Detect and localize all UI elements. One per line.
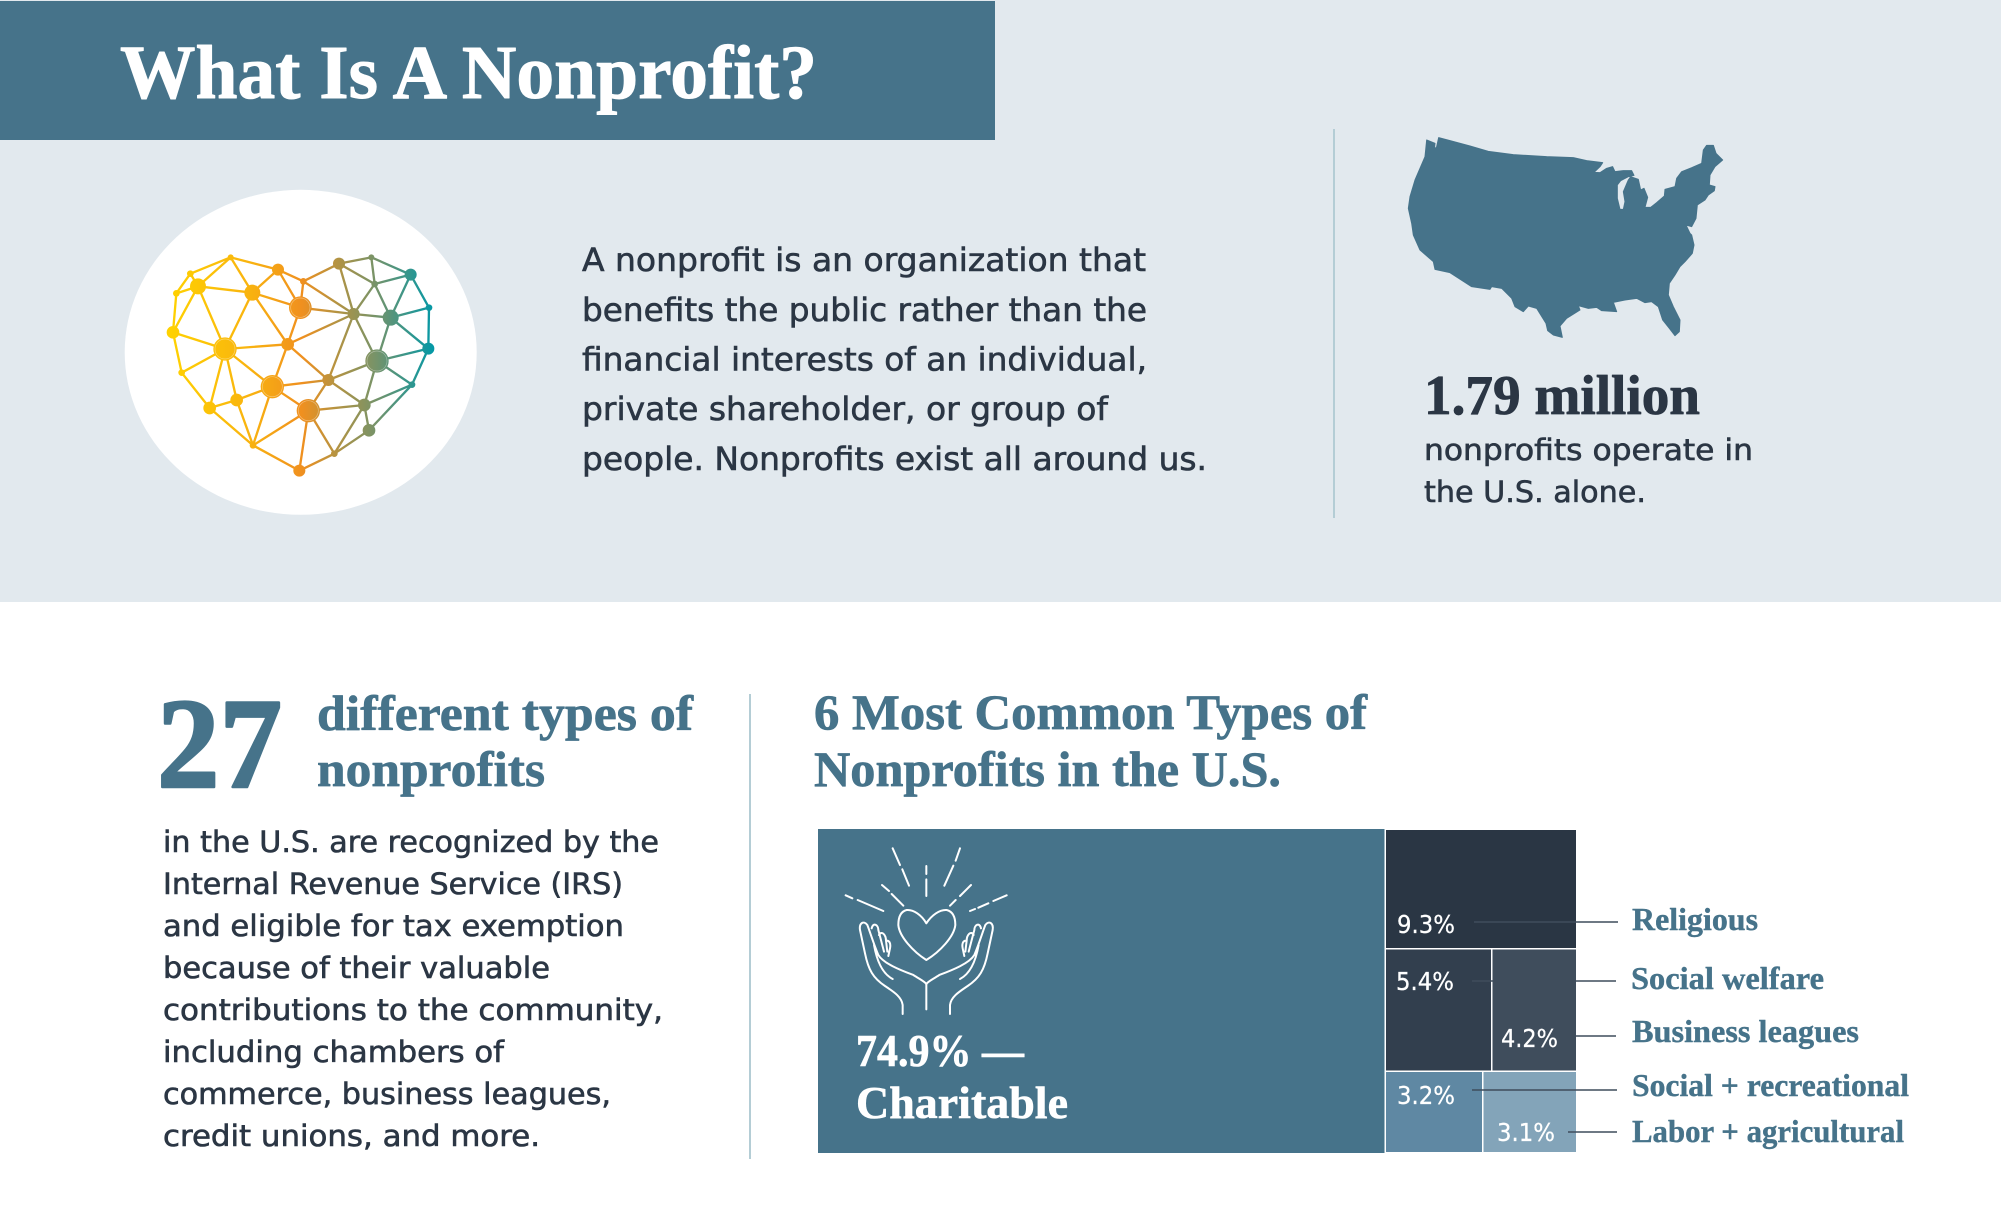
title: What Is A Nonprofit? [120, 31, 817, 115]
panel: top background [0, 0, 2001, 602]
icon: hands holding heart [846, 848, 1007, 1014]
stat: 27 different types [157, 672, 694, 815]
heading: 6 most common types: 6 Most Common Types of [814, 684, 1368, 740]
text block: IRS recognition: credit unions, and more. [163, 1119, 540, 1153]
segment: religious [1386, 830, 1576, 948]
stat caption: the U.S. alone. [1424, 475, 1646, 509]
text block: IRS recognition [163, 825, 663, 1153]
percentage values: 4.2% [1501, 1024, 1558, 1053]
text block: nonprofit definition: people. Nonprofits exist all around us. [582, 440, 1207, 478]
divider: top panel [1333, 129, 1335, 518]
segment: social welfare [1386, 950, 1491, 1070]
text block: IRS recognition: in the U.S. are recognized by the [163, 825, 659, 859]
value: 74.9% charitable [856, 1026, 1068, 1128]
value: 74.9% charitable: Charitable [856, 1078, 1068, 1128]
stat: 27 different types: 27 [157, 672, 282, 815]
text block: nonprofit definition: financial interests of an individual, [582, 340, 1147, 378]
percentage values [1396, 910, 1558, 1147]
legend labels: Business leagues [1632, 1013, 1859, 1049]
text block: nonprofit definition [582, 241, 1207, 478]
treemap chart [818, 829, 1909, 1153]
segment: labor + agricultural [1484, 1072, 1576, 1152]
legend labels: Labor + agricultural [1632, 1113, 1904, 1149]
title banner [0, 1, 995, 140]
text block: IRS recognition: including chambers of [163, 1035, 505, 1069]
leader lines [1472, 922, 1618, 1132]
text block: nonprofit definition: benefits the public rather than the [582, 291, 1147, 329]
stat caption [1424, 433, 1753, 509]
stat: 1.79 million [1424, 365, 1753, 509]
stat: 1.79 million: 1.79 million [1424, 365, 1700, 427]
percentage values: 3.1% [1497, 1118, 1555, 1147]
text block: IRS recognition: and eligible for tax exemption [163, 909, 624, 943]
legend labels [1631, 901, 1909, 1149]
text block: IRS recognition: Internal Revenue Service (IRS) [163, 867, 623, 901]
percentage values: 9.3% [1397, 910, 1455, 939]
divider: lower section [749, 694, 751, 1159]
legend labels: Social + recreational [1632, 1067, 1909, 1103]
value: 74.9% charitable: 74.9% — [856, 1026, 1025, 1076]
heading: 6 most common types [814, 684, 1368, 797]
percentage values: 3.2% [1397, 1081, 1455, 1110]
stat caption: nonprofits operate in [1424, 433, 1753, 467]
legend labels: Religious [1632, 901, 1758, 937]
heading: different types of nonprofits [317, 685, 694, 797]
text block: IRS recognition: contributions to the community, [163, 993, 663, 1027]
icon: map of the United States [1408, 138, 1723, 337]
legend labels: Social welfare [1631, 960, 1824, 996]
segment: charitable [818, 829, 1384, 1153]
text block: IRS recognition: commerce, business leagues, [163, 1077, 611, 1111]
text block: nonprofit definition: private shareholder, or group of [582, 390, 1109, 428]
icon: network heart in white circle [125, 190, 477, 515]
text block: IRS recognition: because of their valuable [163, 951, 550, 985]
segment: social + recreational [1386, 1072, 1482, 1152]
segment: business leagues [1492, 950, 1576, 1070]
heading: different types of nonprofits: nonprofits [317, 741, 545, 797]
heading: 6 most common types: Nonprofits in the U.S. [814, 741, 1281, 797]
heading: different types of nonprofits: different types of [317, 685, 694, 741]
text block: nonprofit definition: A nonprofit is an organization that [582, 241, 1146, 279]
percentage values: 5.4% [1396, 967, 1454, 996]
